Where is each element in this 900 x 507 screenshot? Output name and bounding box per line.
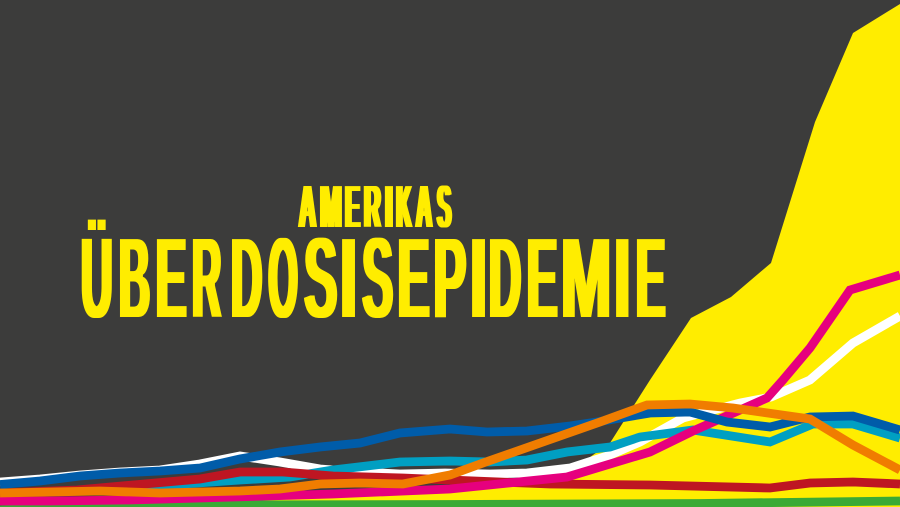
heading: AMERIKAS: R <box>364 172 381 242</box>
line: blue <box>0 412 900 484</box>
line: pink <box>0 275 900 501</box>
heading: ÜBERDOSISEPIDEMIE: I <box>340 213 357 343</box>
heading: ÜBERDOSISEPIDEMIE: M <box>561 213 611 343</box>
heading: ÜBERDOSISEPIDEMIE: P <box>434 213 466 343</box>
heading: AMERIKAS: E <box>345 172 360 242</box>
heading: ÜBERDOSISEPIDEMIE: Ü <box>81 213 112 343</box>
heading: ÜBERDOSISEPIDEMIE: I <box>614 213 630 343</box>
text: E <box>636 213 665 343</box>
heading: ÜBERDOSISEPIDEMIE: D <box>489 213 521 343</box>
heading: AMERIKAS: K <box>396 172 412 242</box>
title <box>81 172 665 343</box>
heading: ÜBERDOSISEPIDEMIE: D <box>231 213 262 343</box>
heading: ÜBERDOSISEPIDEMIE: E <box>527 213 557 343</box>
heading: AMERIKAS: A <box>299 172 316 242</box>
heading: ÜBERDOSISEPIDEMIE: S <box>362 213 393 343</box>
heading: AMERIKAS: I <box>385 172 393 242</box>
heading: ÜBERDOSISEPIDEMIE: I <box>470 213 487 343</box>
line: white <box>0 316 900 482</box>
heading: AMERIKAS: A <box>416 172 432 242</box>
heading: ÜBERDOSISEPIDEMIE: E <box>156 213 186 343</box>
line: orange <box>0 404 900 493</box>
heading: ÜBERDOSISEPIDEMIE: E <box>398 213 429 343</box>
heading: AMERIKAS <box>299 172 451 242</box>
heading: ÜBERDOSISEPIDEMIE: B <box>119 213 150 343</box>
line: red <box>0 472 900 493</box>
title: S <box>437 172 451 242</box>
heading: ÜBERDOSISEPIDEMIE: O <box>269 213 298 343</box>
line: teal <box>100 424 900 491</box>
heading: ÜBERDOSISEPIDEMIE: S <box>304 213 337 343</box>
heading: ÜBERDOSISEPIDEMIE: R <box>192 213 221 343</box>
line: green <box>0 501 900 507</box>
heading: AMERIKAS: M <box>320 172 342 242</box>
heading: ÜBERDOSISEPIDEMIE <box>81 213 665 343</box>
